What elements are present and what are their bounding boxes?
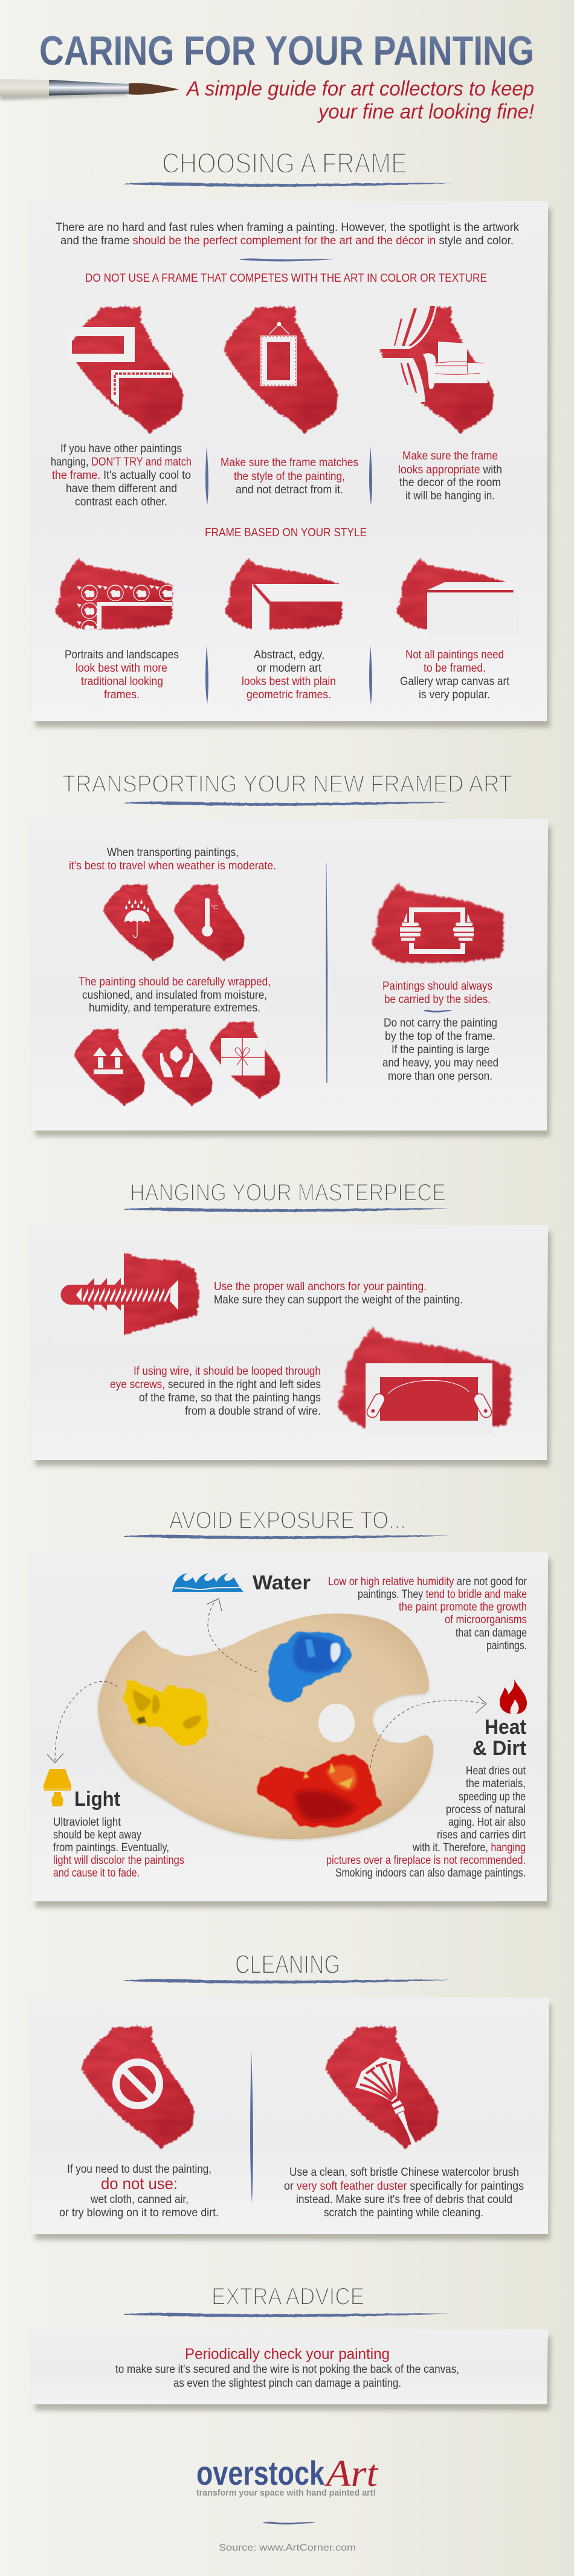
palette [98, 1614, 433, 1840]
heading: choosing a frame: CHOOSING A FRAME [162, 147, 407, 179]
text: column 1: contrast each other. [75, 496, 167, 508]
icon: wall anchor [54, 1245, 199, 1343]
icon: no sign [82, 2026, 194, 2149]
text: carrying: by the top of the frame. [385, 1030, 495, 1043]
subtitle [185, 77, 535, 123]
text: heat and dirt: Heat dries out [466, 1765, 526, 1777]
logo: overstockArt: overstock [196, 2454, 325, 2492]
subtitle: A simple guide for art collectors to keep [185, 77, 534, 100]
text: heat and dirt: Smoking indoors can also damage paintings. [335, 1867, 526, 1880]
text: water: Low or high relative humidity are not good for [328, 1575, 527, 1588]
icon: ornate frame [55, 558, 172, 629]
text: soft brush: Use a clean, soft bristle Chinese watercolor brush [289, 2166, 519, 2179]
text: carrying: Do not carry the painting [384, 1017, 497, 1030]
text: row 2 column 3: Gallery wrap canvas art [400, 675, 510, 688]
icon: flame [500, 1679, 527, 1714]
icon: feather duster [326, 2026, 438, 2149]
icon: lamp [44, 1769, 71, 1806]
text: column 2: and not detract from it. [236, 484, 343, 496]
text: heat and dirt: the materials, [466, 1777, 526, 1790]
text: column 1: If you have other paintings [60, 443, 182, 455]
panel: avoid exposure [28, 1552, 551, 1907]
text: weather: it's best to travel when weather is moderate. [69, 860, 276, 872]
intro text [56, 221, 519, 247]
text: carrying: and heavy, you may need [382, 1057, 498, 1069]
paint: blue [269, 1632, 350, 1702]
heading: extra advice [124, 2283, 451, 2317]
panel: transporting [28, 819, 551, 1137]
heading: avoid exposure [124, 1507, 451, 1539]
text: row 2 column 3: to be framed. [424, 662, 486, 675]
source: Source: www.ArtCorner.com [219, 2543, 356, 2553]
text: wire: If using wire, it should be looped through [134, 1365, 321, 1378]
text: column 2: the style of the painting, [234, 470, 345, 483]
text: column 1: have them different and [66, 482, 177, 495]
arrow: to heat [370, 1696, 486, 1768]
heading: extra advice: EXTRA ADVICE [211, 2283, 364, 2310]
subheading: frame based on your style: FRAME BASED ON YOUR STYLE [205, 526, 367, 539]
text: column 2 [221, 456, 358, 496]
text: water: of microorganisms [445, 1614, 527, 1626]
logo: overstockArt: Art [324, 2453, 379, 2494]
text: column 1: hanging, DON'T TRY and match [51, 456, 192, 469]
text: do not use: or try blowing on it to remove dirt. [59, 2207, 219, 2219]
icon: hands carrying frame by the sides [372, 883, 503, 963]
panel: cleaning [29, 1997, 551, 2240]
panel: extra advice [28, 2329, 551, 2410]
text: periodically check: to make sure it's secured and the wire is not poking the back of the canvas, [115, 2363, 459, 2376]
text: carrying: more than one person. [388, 1070, 492, 1083]
text: do not use [59, 2163, 219, 2219]
text: heat and dirt: speeding up the [459, 1791, 526, 1803]
intro text: There are no hard and fast rules when framing a painting. However, the spotlight is the artwork [56, 221, 519, 234]
text: weather: When transporting paintings, [107, 846, 239, 859]
text: wrapping: The painting should be carefully wrapped, [79, 976, 271, 988]
icon: fragile hands [142, 1028, 213, 1106]
icon: frame matching style [224, 306, 338, 434]
text: column 2: Make sure the frame matches [221, 456, 358, 469]
text: water: paintings. [486, 1640, 527, 1652]
arrow: to water [207, 1598, 257, 1672]
text: periodically check [115, 2346, 459, 2390]
text: row 2 column 3: Not all paintings need [405, 649, 504, 661]
panel: hanging [28, 1225, 551, 1466]
text: wire [110, 1365, 321, 1418]
text: row 2 column 3: is very popular. [419, 689, 490, 701]
icon: paint brush [0, 79, 179, 100]
text: weather [69, 846, 276, 872]
heading: cleaning: CLEANING [235, 1950, 340, 1979]
heading: heat and dirt [472, 1716, 526, 1760]
text: wall anchors: Use the proper wall anchors for your painting. [214, 1280, 427, 1293]
text: carrying [382, 980, 498, 1083]
heading: hanging: HANGING YOUR MASTERPIECE [130, 1179, 446, 1206]
text: column 3: looks appropriate with [398, 464, 502, 476]
text: row 2 column 2: looks best with plain [242, 675, 336, 688]
text: wire: eye screws, secured in the right and left sides [110, 1378, 321, 1391]
text: wall anchors [214, 1280, 463, 1306]
heading: cleaning [124, 1950, 451, 1984]
heading: avoid exposure: AVOID EXPOSURE TO... [169, 1507, 406, 1534]
intro text: and the frame should be the perfect complement for the art and the décor in style and color. [60, 235, 514, 247]
text: carrying: Paintings should always [382, 980, 492, 993]
text: soft brush [284, 2166, 524, 2219]
text: row 2 column 1: frames. [104, 689, 140, 701]
text: column 3: the decor of the room [399, 476, 501, 489]
text: column 3: Make sure the frame [402, 450, 498, 462]
heading: transporting: TRANSPORTING YOUR NEW FRAMED ART [62, 771, 512, 797]
text: do not use: If you need to dust the painting, [67, 2163, 211, 2176]
text: light: and cause it to fade. [53, 1867, 140, 1880]
icon: gallery wrap [396, 558, 519, 635]
text: periodically check: as even the slightest pinch can damage a painting. [173, 2377, 401, 2390]
text: heat and dirt: pictures over a fireplace is not recommended. [326, 1854, 526, 1867]
icon: gift wrap [210, 1021, 280, 1099]
icon: curtain and sofa [375, 301, 494, 434]
text: do not use: do not use: [101, 2175, 178, 2193]
heading: heat and dirt: Heat [485, 1716, 526, 1739]
text: row 2 column 1: Portraits and landscapes [65, 649, 179, 661]
subtitle: your fine art looking fine! [317, 100, 535, 123]
text: light: should be kept away [53, 1829, 141, 1841]
heading: light: Light [74, 1788, 120, 1811]
text: row 2 column 2 [242, 649, 336, 701]
text: row 2 column 2: Abstract, edgy, [254, 649, 324, 661]
text: light: light will discolor the paintings [53, 1854, 184, 1867]
text: do not use: wet cloth, canned air, [90, 2193, 189, 2206]
icon: wire and eye screws [338, 1327, 511, 1434]
text: column 3 [398, 450, 502, 502]
text: column 1 [51, 443, 192, 508]
text: wrapping: cushioned, and insulated from moisture, [82, 989, 267, 1002]
text: column 1: the frame. It's actually cool to [52, 469, 191, 482]
text: periodically check: Periodically check your painting [185, 2346, 390, 2363]
icon: umbrella and rain [103, 884, 174, 961]
icon: water waves [172, 1573, 243, 1592]
text: row 2 column 2: or modern art [257, 662, 322, 675]
text: water: the paint promote the growth [399, 1601, 527, 1614]
text: heat and dirt: rises and carries dirt [437, 1829, 526, 1841]
text: water: paintings. They tend to bridle and make [358, 1588, 527, 1601]
panel: choosing a frame [28, 201, 551, 727]
text: light: from paintings. Eventually, [53, 1841, 169, 1854]
text: heat and dirt: with it. Therefore, hanging [412, 1841, 526, 1854]
icon: thermometer: °C [211, 904, 218, 911]
arrow: to light [47, 1681, 117, 1763]
subheading: do not use a frame that competes: DO NOT USE A FRAME THAT COMPETES WITH THE ART IN COLOR OR TEXTURE [85, 271, 487, 285]
text: column 3: it will be hanging in. [405, 490, 495, 502]
text: water [328, 1575, 527, 1652]
paint: yellow [125, 1682, 207, 1746]
text: light: Ultraviolet light [53, 1816, 121, 1829]
text: row 2 column 1: look best with more [76, 662, 167, 675]
text: soft brush: or very soft feather duster specifically for paintings [284, 2180, 524, 2193]
text: row 2 column 3 [400, 649, 510, 701]
heading: heat and dirt: & Dirt [472, 1737, 526, 1760]
text: soft brush: scratch the painting while cleaning. [324, 2207, 483, 2219]
text: wire: from a double strand of wire. [185, 1405, 321, 1418]
icon: geometric frame [225, 558, 344, 632]
icon: this way up [74, 1028, 145, 1106]
heading: water: Water [253, 1571, 311, 1594]
icon: contrasting frames [66, 306, 183, 434]
text: water: that can damage [456, 1627, 527, 1640]
text: heat and dirt [326, 1765, 526, 1880]
text: carrying: be carried by the sides. [384, 993, 491, 1006]
text: carrying: If the painting is large [392, 1043, 489, 1056]
text: row 2 column 1 [65, 649, 179, 701]
text: row 2 column 2: geometric frames. [247, 689, 331, 701]
icon: thermometer [174, 884, 245, 961]
text: wrapping [79, 976, 271, 1014]
text: row 2 column 1: traditional looking [81, 675, 163, 688]
text: wrapping: humidity, and temperature extremes. [89, 1002, 260, 1014]
text: light [53, 1816, 184, 1880]
text: heat and dirt: aging. Hot air also [448, 1816, 526, 1829]
text: heat and dirt: process of natural [446, 1803, 526, 1816]
paint: red [258, 1754, 379, 1827]
text: wire: of the frame, so that the painting hangs [139, 1392, 321, 1404]
text: soft brush: instead. Make sure it's free of debris that could [296, 2193, 512, 2206]
logo: overstockArt: transform your space with hand painted art! [196, 2488, 376, 2498]
text: wall anchors: Make sure they can support the weight of the painting. [214, 1294, 463, 1306]
